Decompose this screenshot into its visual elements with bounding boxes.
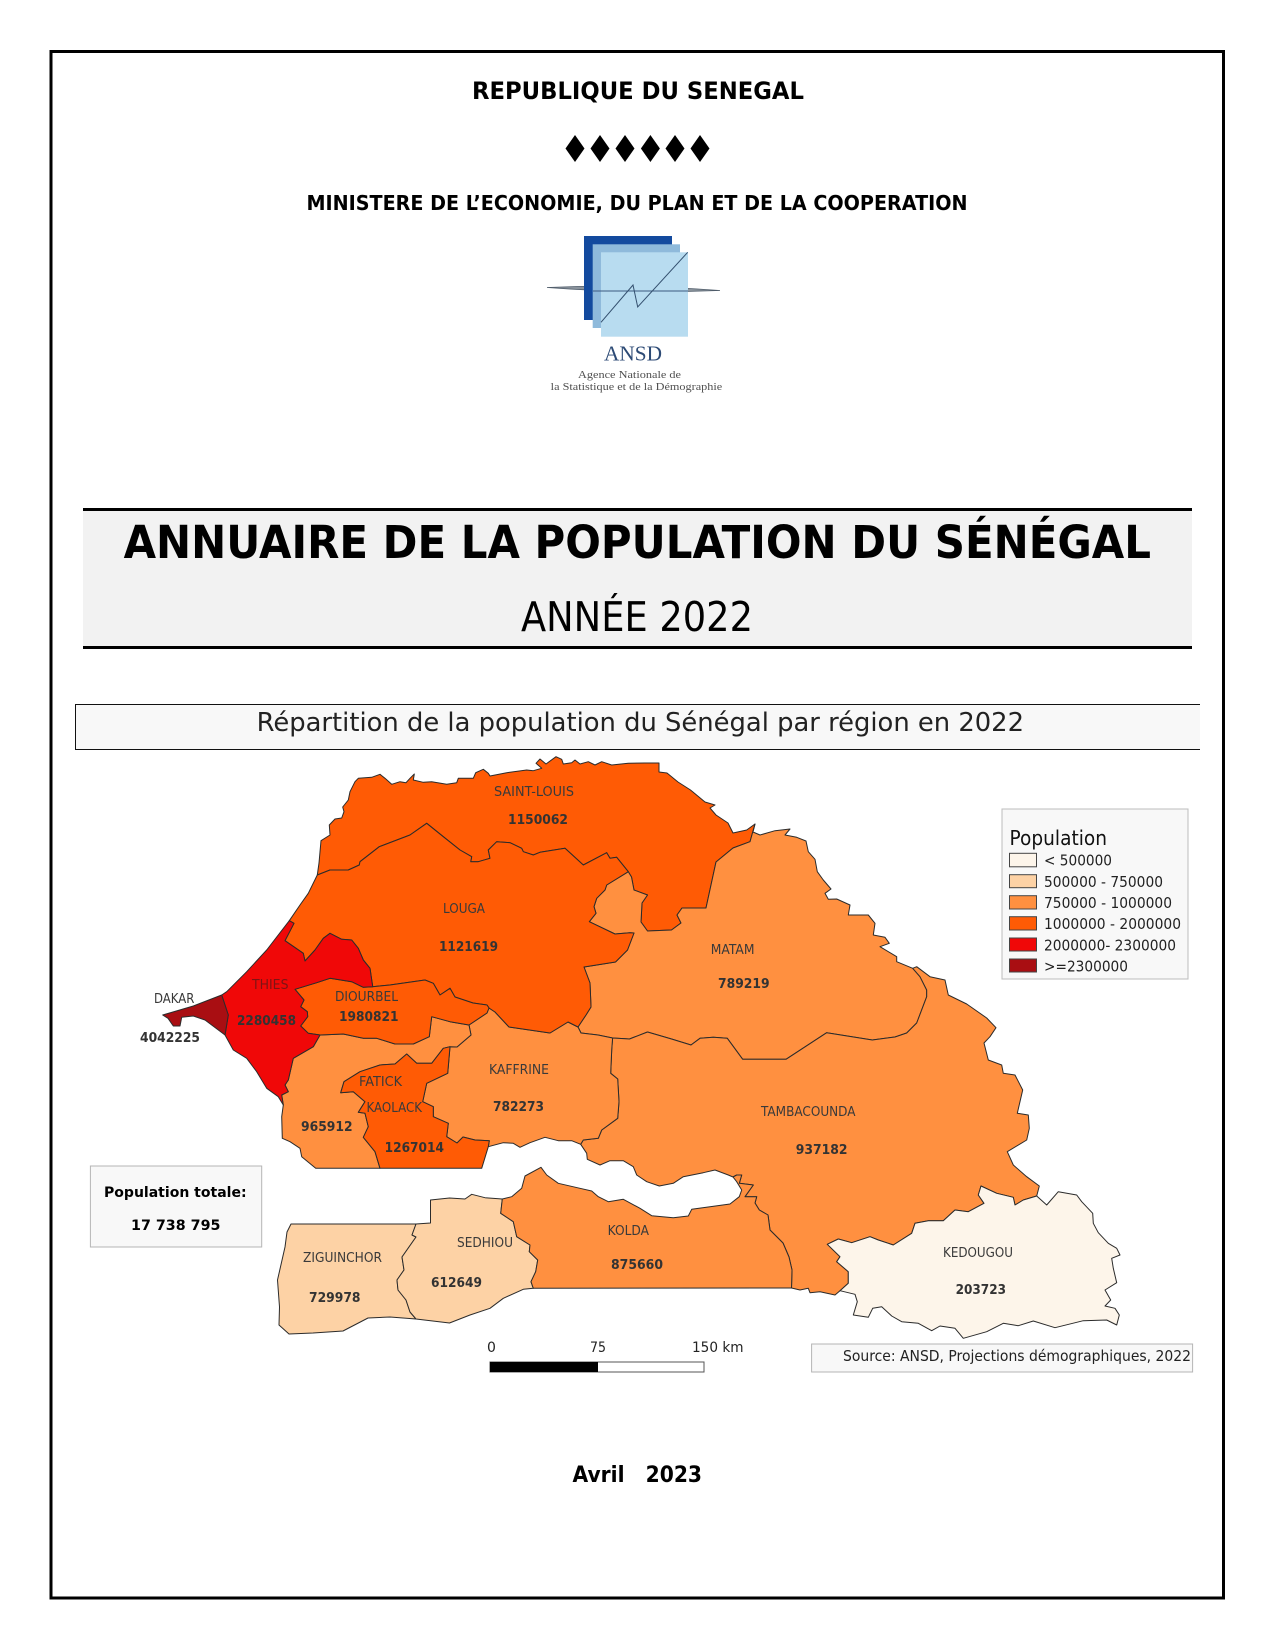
region: Thies xyxy=(222,921,373,1105)
region: Diourbel: DIOURBEL xyxy=(335,990,399,1005)
region: Kaffrine: 782273 xyxy=(493,1100,544,1115)
map title box: Répartition de la population du Sénégal par région en 2022 xyxy=(257,708,1024,738)
region: Sedhiou xyxy=(397,1194,538,1323)
legend: 500000 - 750000 xyxy=(1044,873,1163,891)
choropleth map of regions xyxy=(140,757,1120,1338)
region: Ziguinchor: 729978 xyxy=(309,1291,360,1306)
title banner: ANNÉE 2022 xyxy=(521,593,753,641)
heading: ministere: MINISTERE DE L’ECONOMIE, DU PLAN ET DE LA COOPERATION xyxy=(306,191,968,215)
region: Diourbel xyxy=(295,978,489,1044)
region: Matam xyxy=(578,824,927,1059)
legend: 1000000 - 2000000 xyxy=(1044,915,1181,933)
legend: >=2300000 xyxy=(1044,958,1128,976)
legend: 2000000- 2300000 xyxy=(1044,936,1176,954)
region: Kaffrine xyxy=(423,1008,619,1147)
legend: 750000 - 1000000 xyxy=(1044,894,1172,912)
logo: ANSD: la Statistique et de la Démographie xyxy=(551,381,722,393)
legend xyxy=(1002,809,1188,979)
heading: republique: REPUBLIQUE DU SENEGAL xyxy=(472,77,804,105)
scale bar xyxy=(487,1340,744,1372)
region: Kedougou xyxy=(827,1186,1120,1338)
logo: ANSD: ANSD xyxy=(604,342,662,366)
region: Ziguinchor xyxy=(278,1224,416,1334)
title banner xyxy=(83,508,1192,649)
region: Louga xyxy=(285,823,634,1033)
callout: total population xyxy=(90,1166,262,1247)
region: Louga: 1121619 xyxy=(439,940,498,955)
region: Matam: MATAM xyxy=(711,943,754,958)
logo: ANSD: Agence Nationale de xyxy=(578,369,681,381)
scale bar: 0 xyxy=(487,1340,496,1356)
source note xyxy=(812,1344,1193,1372)
callout: total population: Population totale: xyxy=(104,1185,247,1201)
region: Fatick xyxy=(282,1017,471,1168)
region: Kaolack: FATICK xyxy=(359,1075,402,1090)
region: Matam: 789219 xyxy=(718,977,770,992)
region: Dakar: DAKAR xyxy=(154,992,194,1007)
region: Fatick: 965912 xyxy=(301,1120,353,1135)
region: Kaffrine: KAFFRINE xyxy=(489,1063,549,1078)
region: Kedougou: KEDOUGOU xyxy=(943,1246,1013,1261)
region: Kolda xyxy=(501,1167,792,1288)
region: Dakar: 4042225 xyxy=(140,1031,200,1046)
region: Tambacounda xyxy=(581,967,1039,1295)
scale bar: 75 xyxy=(590,1340,606,1356)
region: Thies: THIES xyxy=(251,978,288,993)
region: Sedhiou: 612649 xyxy=(431,1276,482,1291)
legend: < 500000 xyxy=(1044,852,1112,870)
scale bar: 150 km xyxy=(692,1340,744,1356)
region: Kedougou: 203723 xyxy=(956,1283,1006,1298)
icon: six diamonds xyxy=(566,135,710,162)
region: Saint-Louis: 1150062 xyxy=(508,813,568,828)
region: Tambacounda: TAMBACOUNDA xyxy=(760,1105,856,1120)
region: Sedhiou: SEDHIOU xyxy=(457,1236,513,1251)
legend: Population xyxy=(1010,826,1107,850)
region: Dakar xyxy=(140,992,228,1046)
region: Saint-Louis xyxy=(317,757,755,931)
region: Thies: 2280458 xyxy=(237,1014,296,1029)
region: Kolda: 875660 xyxy=(611,1258,663,1273)
region: Kaolack: KAOLACK xyxy=(366,1101,422,1116)
map title box xyxy=(76,704,1200,750)
region: Diourbel: 1980821 xyxy=(339,1010,398,1025)
source note: Source: ANSD, Projections démographiques, 2022 xyxy=(843,1347,1191,1365)
region: Kaolack xyxy=(341,1047,489,1168)
region: Kaolack: 1267014 xyxy=(385,1141,444,1156)
date: Avril 2023 xyxy=(572,1463,702,1488)
region: Saint-Louis: SAINT-LOUIS xyxy=(494,785,574,800)
logo: ANSD xyxy=(547,236,722,393)
title banner: ANNUAIRE DE LA POPULATION DU SÉNÉGAL xyxy=(124,516,1151,569)
callout: total population: 17 738 795 xyxy=(131,1218,220,1234)
region: Ziguinchor: ZIGUINCHOR xyxy=(303,1251,382,1266)
region: Kolda: KOLDA xyxy=(608,1224,649,1239)
region: Louga: LOUGA xyxy=(443,902,485,917)
region: Tambacounda: 937182 xyxy=(796,1143,848,1158)
